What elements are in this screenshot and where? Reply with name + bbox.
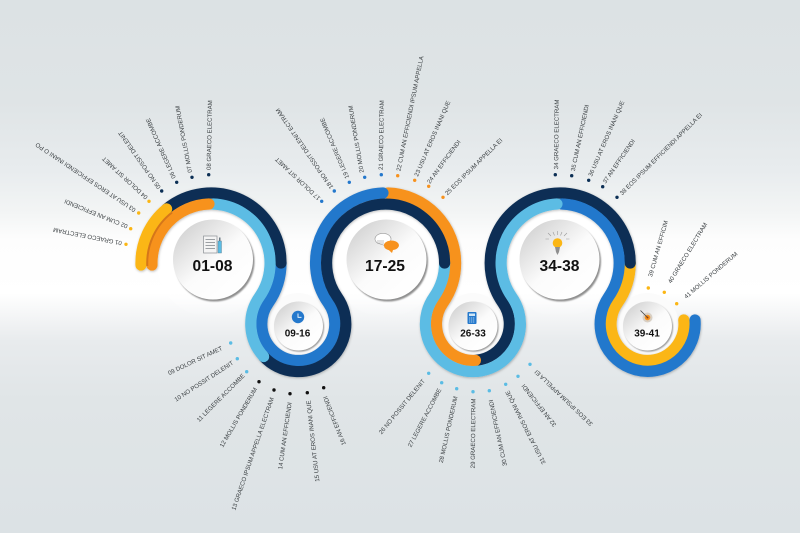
- label 10: 10 NO POSSIT DELENIT: [173, 360, 235, 403]
- label 16: 16 AN EFFICIENDI: [322, 395, 348, 446]
- label 33: 33 EOS IPSUM APPELLA EI: [533, 368, 595, 427]
- label 21: 21 GRAECO ELECTRAM: [378, 100, 386, 170]
- label 30: 30 CUM AN EFFICIENDI: [488, 399, 509, 467]
- label group: 34-41: [553, 100, 739, 305]
- label group: 09-16: [167, 341, 348, 511]
- label 07: 07 MOLLIS PONDERUM: [174, 105, 194, 173]
- label 22: 22 CUM AN EFFICIENDI IPSUM APPELLA: [395, 55, 426, 172]
- node 34-38: [520, 220, 601, 302]
- label 39: 39 CUM AN EFFICIM: [647, 220, 670, 278]
- serpentine two-lane ribbon: [141, 193, 695, 372]
- label 23: 23 USU AT EROS INANI QUE: [413, 100, 452, 178]
- label 03: 03 USU AT EROS EFFICIENDI INANI O PO: [34, 141, 137, 213]
- label 36: 36 USU AT EROS INANI QUE: [587, 100, 626, 178]
- label 02: 02 CUM AN EFFICIENDI: [63, 197, 129, 229]
- icon: document and pen: [204, 236, 222, 253]
- label 34: 34 GRAECO ELECTRAM: [553, 100, 561, 169]
- label 14: 14 CUM AN EFFICIENDI: [277, 402, 294, 470]
- lane A segments: [141, 193, 684, 361]
- label 09: 09 DOLOR SIT AMET: [167, 345, 224, 377]
- label 38: 38 EOS IPSUM EFFICIENDI APPELLA EI: [619, 112, 704, 197]
- label 13: 13 GRAECO IPSUM APPELLA ELECTRAM: [231, 397, 276, 511]
- icon: speech bubbles: [375, 233, 399, 253]
- node 17-25: [346, 220, 428, 302]
- label 05: 05 NO POSSIT DELENIT: [117, 129, 163, 190]
- label group: 26-33: [378, 363, 595, 468]
- label 19: 19 LEGERE ACCOMBE: [319, 117, 351, 179]
- label 12: 12 MOLLIS PONDERUM: [219, 387, 259, 449]
- label 35: 35 CUM AN EFFICIENDI: [570, 104, 591, 172]
- label 31: 31 USU AT EROS INANI QUE: [504, 389, 548, 465]
- label: 09-16: 09-16: [285, 328, 311, 340]
- node 26-33: [448, 302, 498, 352]
- label 11: 11 LEGERE ACCOMBE: [196, 373, 247, 424]
- icon: light bulb: [546, 231, 570, 255]
- label 26: 26 NO POSSIT DELENIT: [378, 378, 427, 436]
- label 15: 15 USU AT EROS INANI QUE: [305, 400, 321, 482]
- label 18: 18 NO POSSIT DELENIT ECTRAM: [275, 107, 335, 190]
- label 04: 04 DOLOR SIT AMET: [101, 155, 149, 200]
- label: 17-25: 17-25: [365, 258, 405, 275]
- label group: 01-08: [34, 100, 214, 246]
- orange lane shading edge: [147, 212, 172, 266]
- label: 34-38: 34-38: [540, 258, 580, 275]
- label: 26-33: 26-33: [460, 328, 486, 340]
- label 25: 25 EOS IPSUM APPELLA EI: [444, 137, 504, 197]
- label 37: 37 AN EFFICIENDI: [602, 138, 637, 185]
- label 08: 08 GRAECO ELECTRAM: [206, 100, 214, 170]
- label 32: 32 AN EFFICIENDI: [520, 382, 558, 428]
- label 40: 40 GRAECO ELECTRAM: [667, 222, 709, 285]
- label 06: 06 LEGERE ACCOMBE: [145, 117, 178, 179]
- icon: target with arrow: [640, 310, 652, 322]
- node 09-16: [274, 302, 324, 352]
- lane B segments: [152, 204, 695, 372]
- label 41: 41 MOLLIS PONDERUM: [683, 251, 739, 300]
- white ring interiors: [157, 209, 678, 355]
- label 20: 20 MOLLIS PONDERUM: [347, 105, 366, 173]
- label 27: 27 LEGERE ACCOMBE: [407, 387, 443, 449]
- label 29: 29 GRAECO ELECTRAM: [470, 399, 477, 468]
- node 01-08: [173, 220, 254, 302]
- label 28: 28 MOLLIS PONDERUM: [438, 396, 460, 464]
- icon: calculator: [468, 312, 476, 324]
- label: 01-08: 01-08: [193, 258, 233, 275]
- label 17: 17 DOLOR SIT AMET: [274, 155, 322, 201]
- label 24: 24 AN EFFICIENDI: [426, 139, 463, 185]
- node 39-41: [623, 302, 673, 352]
- label: 39-41: 39-41: [634, 328, 660, 340]
- label group: 17-25: [274, 55, 504, 203]
- label 01: 01 GRAECO ELECTRAM: [53, 226, 122, 246]
- icon: clock: [292, 311, 304, 323]
